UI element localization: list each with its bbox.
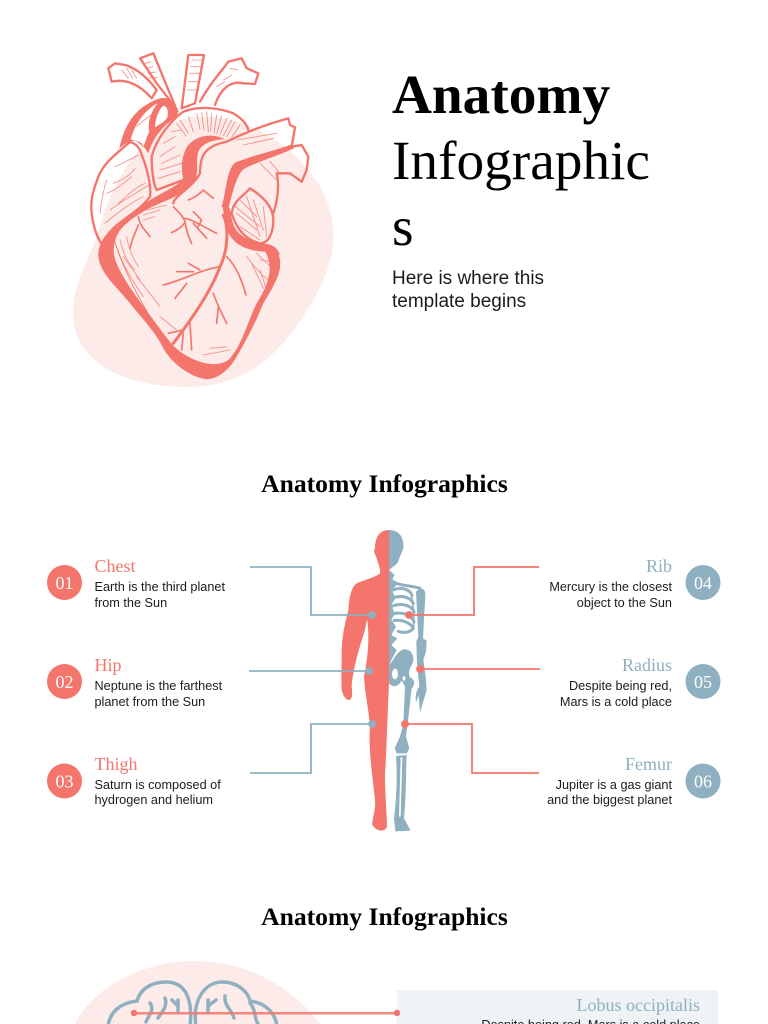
title: [392, 64, 650, 257]
skeleton: [389, 530, 427, 831]
connector: thigh: [250, 721, 375, 773]
ribs: [392, 581, 420, 632]
lobus occipitalis card: [397, 990, 718, 1024]
right chamber band: [223, 205, 280, 255]
item 03 thigh: hydrogen and helium: [94, 793, 213, 807]
icon: anatomical heart: [91, 53, 308, 379]
panel: brain: [75, 902, 718, 1024]
item 04 rib: 04: [694, 573, 712, 593]
item 06 femur: 06: [694, 772, 712, 792]
item 01 chest: 01: [56, 573, 74, 593]
connector: brain: [131, 1010, 400, 1016]
item 05 radius: Despite being red,: [569, 679, 672, 693]
arm bones: [416, 589, 427, 713]
connector: hip: [249, 668, 372, 674]
title: Anatomy: [392, 64, 610, 125]
item 01 chest: from the Sun: [94, 596, 167, 610]
heading: brain: Anatomy Infographics: [261, 902, 508, 931]
item 01 chest: Chest: [94, 556, 136, 576]
item 06 femur: Femur: [625, 754, 672, 774]
body silhouette: [341, 530, 389, 831]
connector: rib: [406, 567, 539, 618]
icon: brain: [108, 982, 277, 1024]
item 03 thigh: [47, 754, 221, 807]
item 05 radius: 05: [694, 672, 712, 692]
item 03 thigh: Thigh: [94, 754, 138, 774]
item 06 femur: and the biggest planet: [547, 793, 672, 807]
lower leg and foot: [394, 755, 411, 831]
pelvis and femur: [389, 649, 414, 753]
item 02 hip: [47, 655, 223, 709]
skull: [389, 530, 403, 570]
item 06 femur: Jupiter is a gas giant: [556, 778, 672, 792]
item 02 hip: planet from the Sun: [94, 695, 205, 709]
connector: radius: [417, 666, 540, 672]
panel: body map: [47, 469, 720, 831]
item 04 rib: Mercury is the closest: [549, 580, 672, 594]
item 04 rib: object to the Sun: [577, 596, 672, 610]
item 01 chest: [47, 556, 225, 610]
item 05 radius: Mars is a cold place: [560, 695, 672, 709]
connector: femur: [402, 721, 539, 773]
panel: hero: [73, 53, 650, 387]
heart background blob: [73, 117, 333, 387]
item 02 hip: Hip: [94, 655, 122, 675]
item 02 hip: 02: [56, 672, 74, 692]
heart hatching: [100, 60, 280, 355]
superior vena cava shape: [119, 98, 178, 153]
title: Infographic: [392, 130, 650, 191]
brain background blob: [75, 961, 320, 1024]
item 03 thigh: 03: [56, 772, 74, 792]
subtitle: [392, 268, 544, 312]
figure: half body half skeleton: [341, 530, 427, 831]
title: s: [392, 196, 414, 257]
skeleton gaps: [392, 669, 398, 679]
upper muscle band: [115, 136, 225, 235]
item 06 femur: [547, 754, 720, 807]
item 04 rib: Rib: [646, 556, 672, 576]
item 05 radius: [560, 655, 720, 709]
subtitle: template begins: [392, 291, 526, 312]
spine: [389, 570, 397, 665]
item 05 radius: Radius: [622, 655, 672, 675]
item 02 hip: Neptune is the farthest: [94, 679, 223, 693]
lobus occipitalis card: Lobus occipitalis: [577, 995, 700, 1015]
connector: chest: [250, 567, 375, 618]
ventricle thick outline: [98, 227, 280, 379]
item 04 rib: [549, 556, 720, 610]
heading: body map: Anatomy Infographics: [261, 469, 508, 498]
coronary vessels: [130, 190, 246, 350]
item 03 thigh: Saturn is composed of: [94, 778, 221, 792]
subtitle: Here is where this: [392, 268, 544, 289]
item 01 chest: Earth is the third planet: [94, 580, 225, 594]
